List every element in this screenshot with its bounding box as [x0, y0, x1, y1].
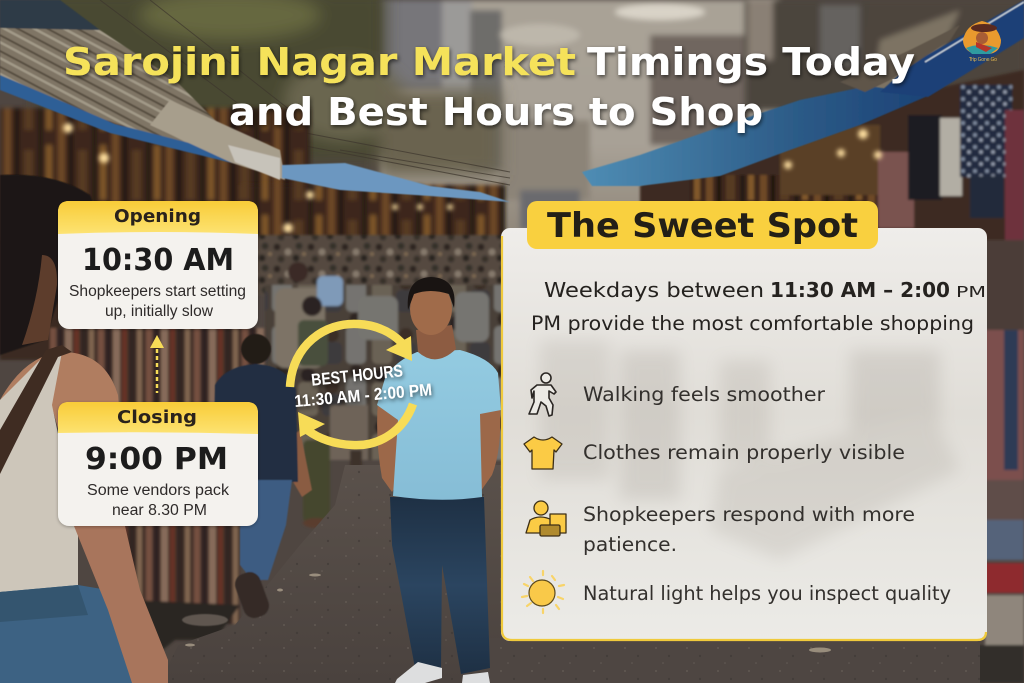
opening note: Shopkeepers start setting	[69, 283, 246, 300]
right shops	[640, 70, 1024, 683]
best hours cycle arrows	[290, 324, 413, 445]
trees top left	[40, 0, 500, 175]
road litter	[185, 574, 831, 652]
road	[160, 465, 510, 683]
best hours label: BEST HOURS	[310, 361, 404, 390]
icon: t-shirt	[524, 437, 562, 469]
best hours label	[294, 361, 433, 411]
sky and distant buildings	[380, 0, 780, 240]
intro text: PM provide the most comfortable shopping	[531, 312, 974, 335]
title: Sarojini Nagar Market	[63, 40, 576, 84]
opening header	[58, 201, 258, 234]
panel: opening time card	[58, 201, 258, 329]
shops left	[0, 108, 310, 243]
title: and Best Hours to Shop	[229, 90, 763, 134]
closing label: Closing	[117, 407, 197, 428]
closing note: Some vendors pack	[87, 482, 229, 499]
icon: sun	[522, 571, 564, 613]
woman in foreground left	[0, 175, 168, 683]
shop lights	[63, 123, 882, 233]
opening time: 10:30 AM	[82, 243, 234, 278]
icon: logo badge	[963, 21, 1001, 63]
best hours label: 11:30 AM - 2:00 PM	[294, 380, 433, 411]
intro text: Weekdays between	[544, 278, 764, 302]
opening note	[69, 283, 246, 320]
title: Timings Today	[587, 40, 915, 84]
road speckle	[160, 465, 980, 683]
closing note: near 8.30 PM	[112, 502, 207, 519]
panel: the sweet spot	[501, 201, 987, 641]
right awning	[582, 0, 1024, 186]
man in blue from behind	[182, 334, 312, 626]
overhead wires	[100, 0, 510, 185]
market crowd	[255, 235, 505, 528]
benefit list: patience.	[583, 533, 677, 556]
intro text: 11:30 AM – 2:00	[770, 278, 950, 302]
panel edge	[502, 236, 986, 640]
faint photo inside panel	[540, 340, 960, 560]
benefit list: Clothes remain properly visible	[583, 441, 905, 464]
central man	[377, 277, 501, 683]
opening note: up, initially slow	[105, 303, 214, 320]
hanging clothes left	[0, 240, 265, 660]
left awning	[0, 0, 510, 202]
benefit list: Natural light helps you inspect quality	[583, 582, 951, 605]
closing header	[58, 402, 258, 434]
benefit list: Walking feels smoother	[583, 383, 826, 406]
closing note	[87, 482, 229, 519]
arrow: closing to opening	[150, 335, 164, 393]
title	[63, 40, 915, 134]
panel: closing time card	[58, 402, 258, 526]
buildings top right	[745, 0, 1024, 120]
closing time: 9:00 PM	[85, 442, 228, 477]
icon: walking person	[529, 373, 556, 416]
intro text	[531, 278, 986, 335]
benefit list: Shopkeepers respond with more	[583, 503, 915, 526]
benefit list	[583, 383, 951, 605]
sweet spot header: The Sweet Spot	[547, 206, 858, 246]
opening label: Opening	[114, 206, 201, 227]
icon: shopkeeper at computer	[526, 501, 566, 536]
intro text: PM	[956, 283, 986, 301]
icon: logo badge: Trip Gone Go	[968, 57, 997, 63]
